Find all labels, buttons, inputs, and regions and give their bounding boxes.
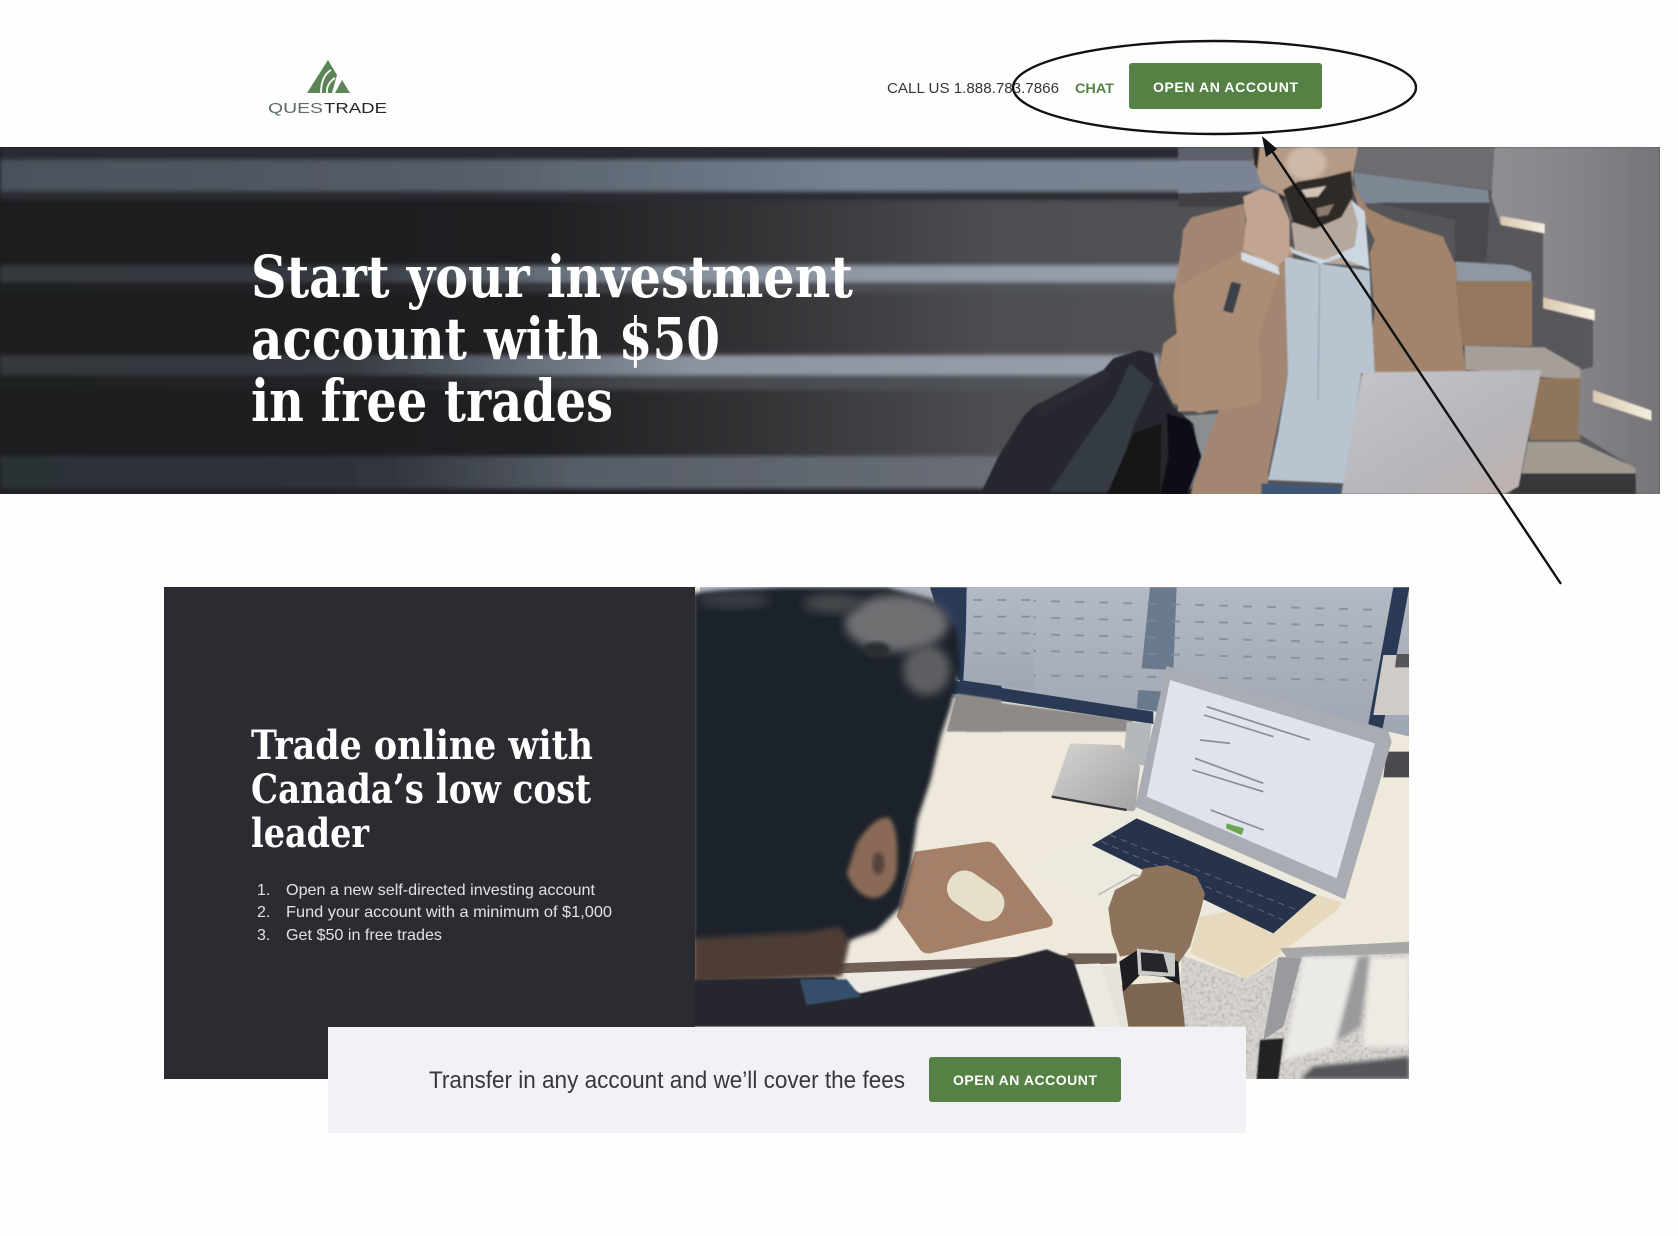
table bar and floor (1067, 942, 1409, 1079)
jacket sleeve (1158, 247, 1293, 497)
panel heading: Canada’s low cost (251, 766, 591, 813)
right half of desk scene (700, 580, 1410, 1079)
stairs, wall and man, right side (1178, 147, 1660, 494)
man's head (693, 587, 961, 983)
desk items (1383, 752, 1409, 777)
laptop (1092, 666, 1392, 979)
office photo: man at laptop (693, 580, 1410, 1079)
panel heading: Trade online with (251, 722, 593, 769)
watch (1119, 948, 1180, 992)
hero heading: in free trades (251, 367, 613, 435)
annotation arrow (1262, 136, 1561, 584)
hero heading: Start your investment (251, 243, 853, 311)
desk edge (840, 953, 1117, 973)
hero heading (251, 243, 853, 435)
jacket arm (1182, 408, 1218, 412)
steps list: Fund your account with a minimum of $1,000 (286, 904, 612, 921)
steps list: Open a new self-directed investing account (286, 882, 596, 899)
monitor left edge (930, 587, 1033, 732)
steps list: 2. (257, 904, 270, 921)
sleeve cuff (1241, 252, 1280, 275)
promo section (164, 580, 1410, 1133)
hero heading: account with $50 (251, 305, 720, 373)
sleeve buttons (1223, 282, 1241, 313)
jacket (1178, 183, 1466, 494)
left half of desk scene (693, 587, 1120, 1027)
transfer button: OPEN AN ACCOUNT (953, 1072, 1097, 1088)
concrete wall (1491, 147, 1660, 494)
backpack (980, 350, 1202, 495)
steps list: 3. (257, 927, 270, 944)
logo wordmark: QUES (268, 100, 323, 117)
logo wordmark (268, 100, 387, 117)
hero photo: man on stairs (0, 147, 1660, 497)
logo wordmark: TRADE (324, 100, 387, 117)
hero banner (0, 147, 1660, 497)
man's shoulder (693, 949, 1095, 1027)
man (1178, 147, 1541, 494)
mouse (940, 864, 1011, 928)
panel heading (251, 722, 593, 857)
annotation ellipse (1013, 41, 1416, 134)
laptop (1341, 370, 1541, 494)
dark text panel (164, 587, 696, 1079)
transfer button (929, 1057, 1121, 1102)
chat link: CHAT (1075, 80, 1114, 96)
header button (1129, 63, 1322, 109)
hand and forearm (1102, 865, 1205, 1027)
steps list: Get $50 in free trades (286, 927, 442, 944)
panel heading: leader (251, 810, 370, 857)
hand holding phone (1243, 188, 1290, 267)
monitor stand (1052, 722, 1152, 812)
shirt (1261, 200, 1375, 494)
transfer bar (328, 1027, 1246, 1133)
upper stairs (1178, 147, 1637, 494)
keyboard (1092, 818, 1317, 933)
steps list (257, 882, 612, 944)
neck and face (1253, 147, 1368, 267)
stair lights (1501, 216, 1651, 421)
steps list: 1. (257, 882, 270, 899)
header button: OPEN AN ACCOUNT (1153, 79, 1298, 95)
header navigation (268, 60, 1322, 117)
transfer text: Transfer in any account and we’ll cover the fees (429, 1067, 905, 1094)
logo (268, 60, 387, 117)
logo mark (307, 60, 350, 93)
phone number: CALL US 1.888.783.7866 (887, 81, 1059, 97)
backpack and sleeve (980, 247, 1293, 497)
monitor (700, 580, 1410, 737)
mouse pad (897, 842, 1053, 953)
